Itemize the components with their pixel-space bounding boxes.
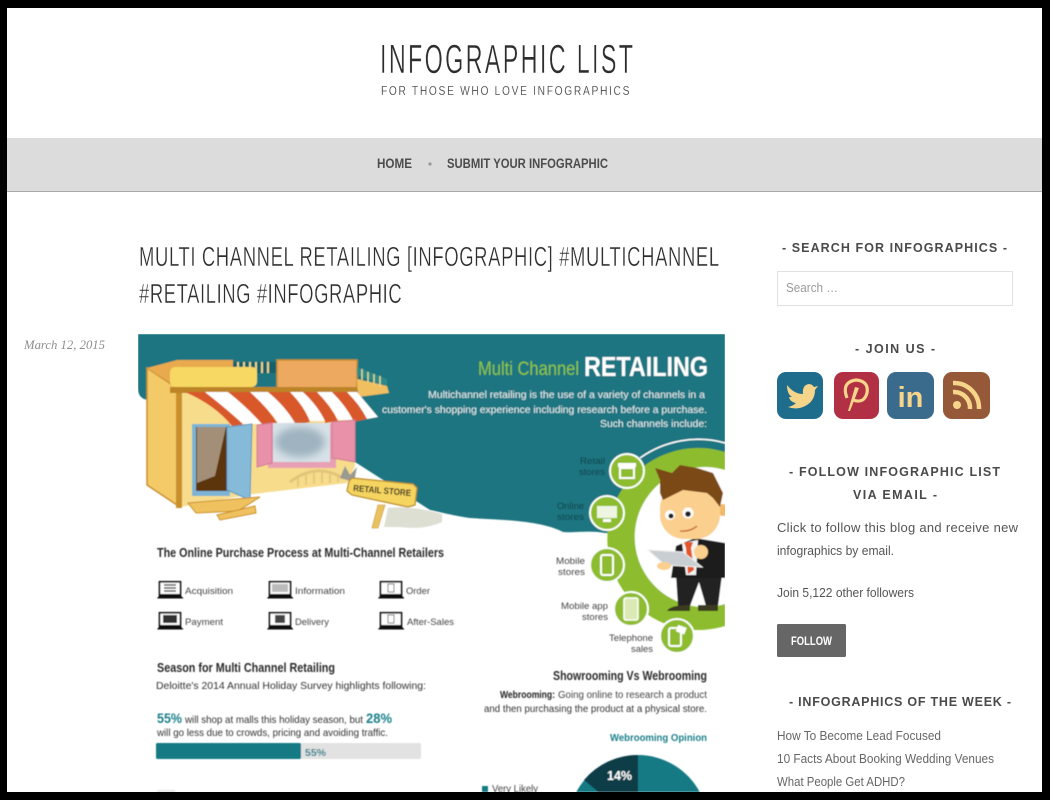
follow button: FOLLOW	[791, 636, 832, 648]
channel: mobile app stores: Mobile app	[561, 601, 608, 611]
channel: mobile stores	[556, 548, 624, 582]
step: information: Information	[295, 586, 345, 597]
section: season for multi channel retailing: will go less due to crowds, pricing and avoiding traffic.	[156, 727, 388, 739]
legend: very likely: Very Likely	[492, 784, 538, 795]
channel: online stores	[557, 496, 624, 530]
post title	[139, 242, 719, 310]
channel: online stores: Online	[557, 501, 584, 511]
teal header background	[138, 334, 725, 533]
fence	[290, 466, 357, 487]
step: payment	[157, 613, 223, 630]
sidebar: follow via email: Click to follow this blog and receive new	[777, 520, 1019, 535]
navigation bar: HOME	[377, 156, 412, 171]
section: online purchase process: The Online Purchase Process at Multi-Channel Retailers	[157, 546, 444, 560]
step: delivery	[267, 613, 329, 630]
section: online purchase process	[157, 546, 454, 630]
legend: very likely	[481, 784, 538, 792]
channel: mobile app stores	[561, 592, 648, 626]
channel: telephone sales: Telephone	[609, 633, 653, 643]
section: showrooming vs webrooming: Webrooming:	[500, 690, 555, 701]
green ring	[607, 439, 725, 630]
channel: retail stores: Retail	[580, 456, 605, 466]
intro text: customer's shopping experience including research before a purchase.	[382, 404, 707, 416]
illustration: retail store	[147, 360, 442, 528]
section: showrooming vs webrooming: and then purchasing the product at a physical store.	[484, 704, 707, 715]
sidebar: infographics of the week: - INFOGRAPHICS OF THE WEEK -	[789, 695, 1011, 709]
section: season for multi channel retailing: 55%	[157, 710, 182, 726]
icon: linkedin	[887, 372, 934, 419]
step: after-sales	[378, 613, 454, 630]
step: after-sales: After-Sales	[407, 617, 454, 628]
navigation bar	[0, 138, 1050, 192]
sidebar: infographics of the week: 10 Facts About Booking Wedding Venues	[777, 751, 994, 766]
sidebar: follow via email: infographics by email.	[777, 544, 894, 558]
heading: multi channel retailing	[478, 356, 708, 378]
tagline: FOR THOSE WHO LOVE INFOGRAPHICS	[381, 85, 630, 98]
step: acquisition	[157, 582, 233, 598]
intro text: Multichannel retailing is the use of a variety of channels in a	[428, 389, 705, 401]
section: showrooming vs webrooming: Webrooming Opinion	[610, 732, 707, 744]
heading: multi channel retailing: Multi Channel	[478, 359, 579, 380]
step: acquisition: Acquisition	[185, 586, 233, 597]
pie chart: webrooming opinion	[576, 755, 700, 792]
sidebar: follow via email	[777, 465, 1019, 657]
channel: mobile app stores: stores	[582, 612, 609, 622]
channel: mobile stores: stores	[558, 567, 586, 577]
sign: retail store: RETAIL STORE	[353, 483, 411, 498]
post title: MULTI CHANNEL RETAILING [INFOGRAPHIC] #MULTICHANNEL	[139, 242, 719, 273]
channel: retail stores: stores	[579, 467, 606, 477]
channel: mobile stores: Mobile	[556, 556, 585, 566]
awning stripes	[185, 392, 378, 428]
step: delivery: Delivery	[295, 617, 329, 628]
progress bar: 55%: 55%	[305, 747, 327, 759]
sidebar: infographics of the week: How To Become Lead Focused	[777, 728, 941, 743]
sidebar: follow via email: - FOLLOW INFOGRAPHIC LIST	[789, 465, 1000, 479]
icon: rss	[943, 372, 990, 419]
infographic	[138, 334, 729, 795]
sidebar: join us: - JOIN US -	[855, 342, 935, 356]
section: season for multi channel retailing	[156, 661, 426, 792]
section: season for multi channel retailing: Season for Multi Channel Retailing	[157, 661, 335, 675]
icon: linkedin: in	[898, 382, 923, 414]
channel: telephone sales: sales	[631, 644, 654, 654]
sidebar: follow via email: VIA EMAIL -	[853, 488, 937, 502]
navigation bar: SUBMIT YOUR INFOGRAPHIC	[447, 156, 608, 171]
section: showrooming vs webrooming	[484, 669, 707, 744]
channel: telephone sales	[609, 619, 694, 654]
illustration: businessman with tablet	[648, 465, 729, 611]
post date: March 12, 2015	[23, 337, 105, 352]
section: showrooming vs webrooming: Going online to research a product	[558, 690, 707, 701]
channel: retail stores	[579, 454, 644, 488]
sidebar: infographics of the week	[777, 695, 1011, 789]
section: season for multi channel retailing: will shop at malls this holiday season, but	[184, 714, 363, 726]
step: payment: Payment	[185, 617, 223, 628]
heading: multi channel retailing: RETAILING	[584, 351, 708, 382]
step: order	[378, 582, 430, 598]
sidebar: search	[778, 241, 1012, 306]
post title: #RETAILING #INFOGRAPHIC	[139, 279, 402, 310]
icon: pinterest	[834, 372, 879, 419]
intro text: Such channels include:	[600, 418, 707, 430]
sidebar: infographics of the week: What People Get ADHD?	[777, 774, 905, 789]
search box: Search …	[786, 280, 838, 295]
sidebar: join us	[777, 342, 990, 419]
channel: online stores: stores	[557, 512, 585, 522]
window	[257, 420, 355, 468]
search box	[778, 272, 1012, 306]
follow button	[777, 624, 846, 657]
sidebar: follow via email: Join 5,122 other followers	[777, 586, 914, 600]
sign: retail store	[347, 478, 417, 528]
sidebar: search: - SEARCH FOR INFOGRAPHICS -	[782, 241, 1007, 255]
intro text	[382, 389, 707, 430]
site title: INFOGRAPHIC LIST	[380, 37, 633, 83]
step: information	[267, 582, 345, 598]
icon: twitter	[777, 372, 823, 419]
step: order: Order	[406, 586, 430, 597]
section: season for multi channel retailing: 28%	[366, 710, 393, 726]
pie chart: webrooming opinion: 14%	[607, 769, 632, 783]
section: showrooming vs webrooming: Showrooming Vs Webrooming	[553, 669, 707, 683]
section: season for multi channel retailing: Deloitte's 2014 Annual Holiday Survey highlights following:	[156, 680, 426, 692]
door	[188, 424, 260, 520]
progress bar: 55%	[156, 743, 421, 759]
